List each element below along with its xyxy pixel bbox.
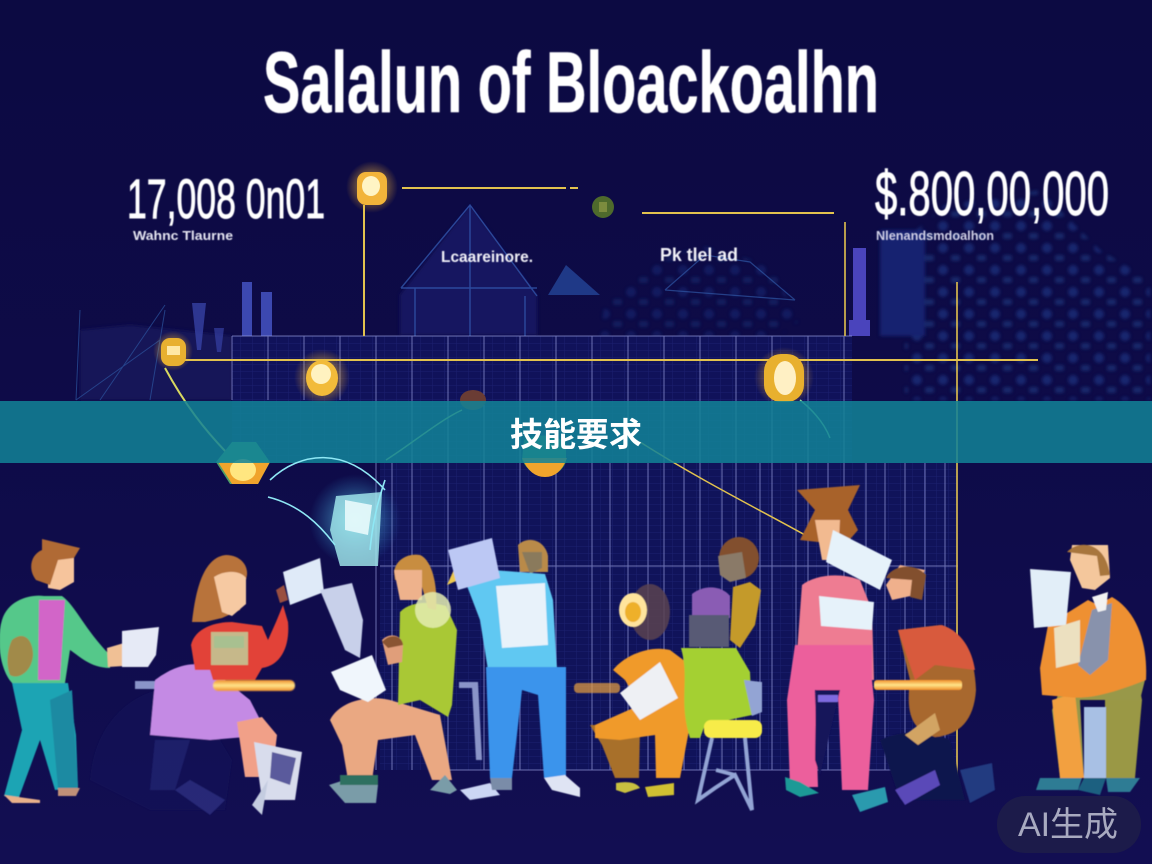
city skyline background [76, 190, 1150, 400]
AI badge: AI生成 [1018, 806, 1118, 844]
person: red shirt with purple skirt [90, 555, 324, 815]
AI badge [997, 796, 1141, 853]
stat: left figure: Wahnc Tlaurne [133, 228, 233, 243]
person: standing back figure [689, 537, 761, 648]
teal banner: 技能要求 [510, 408, 642, 456]
glowing nodes [153, 161, 814, 484]
person: blue outfit [447, 538, 580, 800]
stat: right figure: Nlenandsmdoalhon [876, 228, 994, 243]
person: orange jacket right [1030, 545, 1146, 795]
chart grid and connector lines [165, 188, 1038, 790]
person: seated reader and lime outfit [320, 555, 457, 803]
stat: left figure [127, 167, 325, 243]
person: orange seated with paper [574, 584, 762, 810]
person: green jacket [0, 539, 159, 803]
person: red-brown leaning [874, 565, 995, 805]
person: pink outfit [785, 485, 892, 812]
mid labels [441, 245, 738, 266]
stat: left figure: 17,008 0n01 [127, 167, 325, 230]
teal banner [0, 401, 1152, 463]
hologram document and wires [268, 458, 401, 566]
mid labels: Pk tlel ad [660, 245, 738, 265]
mid labels: Lcaareinore. [441, 249, 533, 266]
